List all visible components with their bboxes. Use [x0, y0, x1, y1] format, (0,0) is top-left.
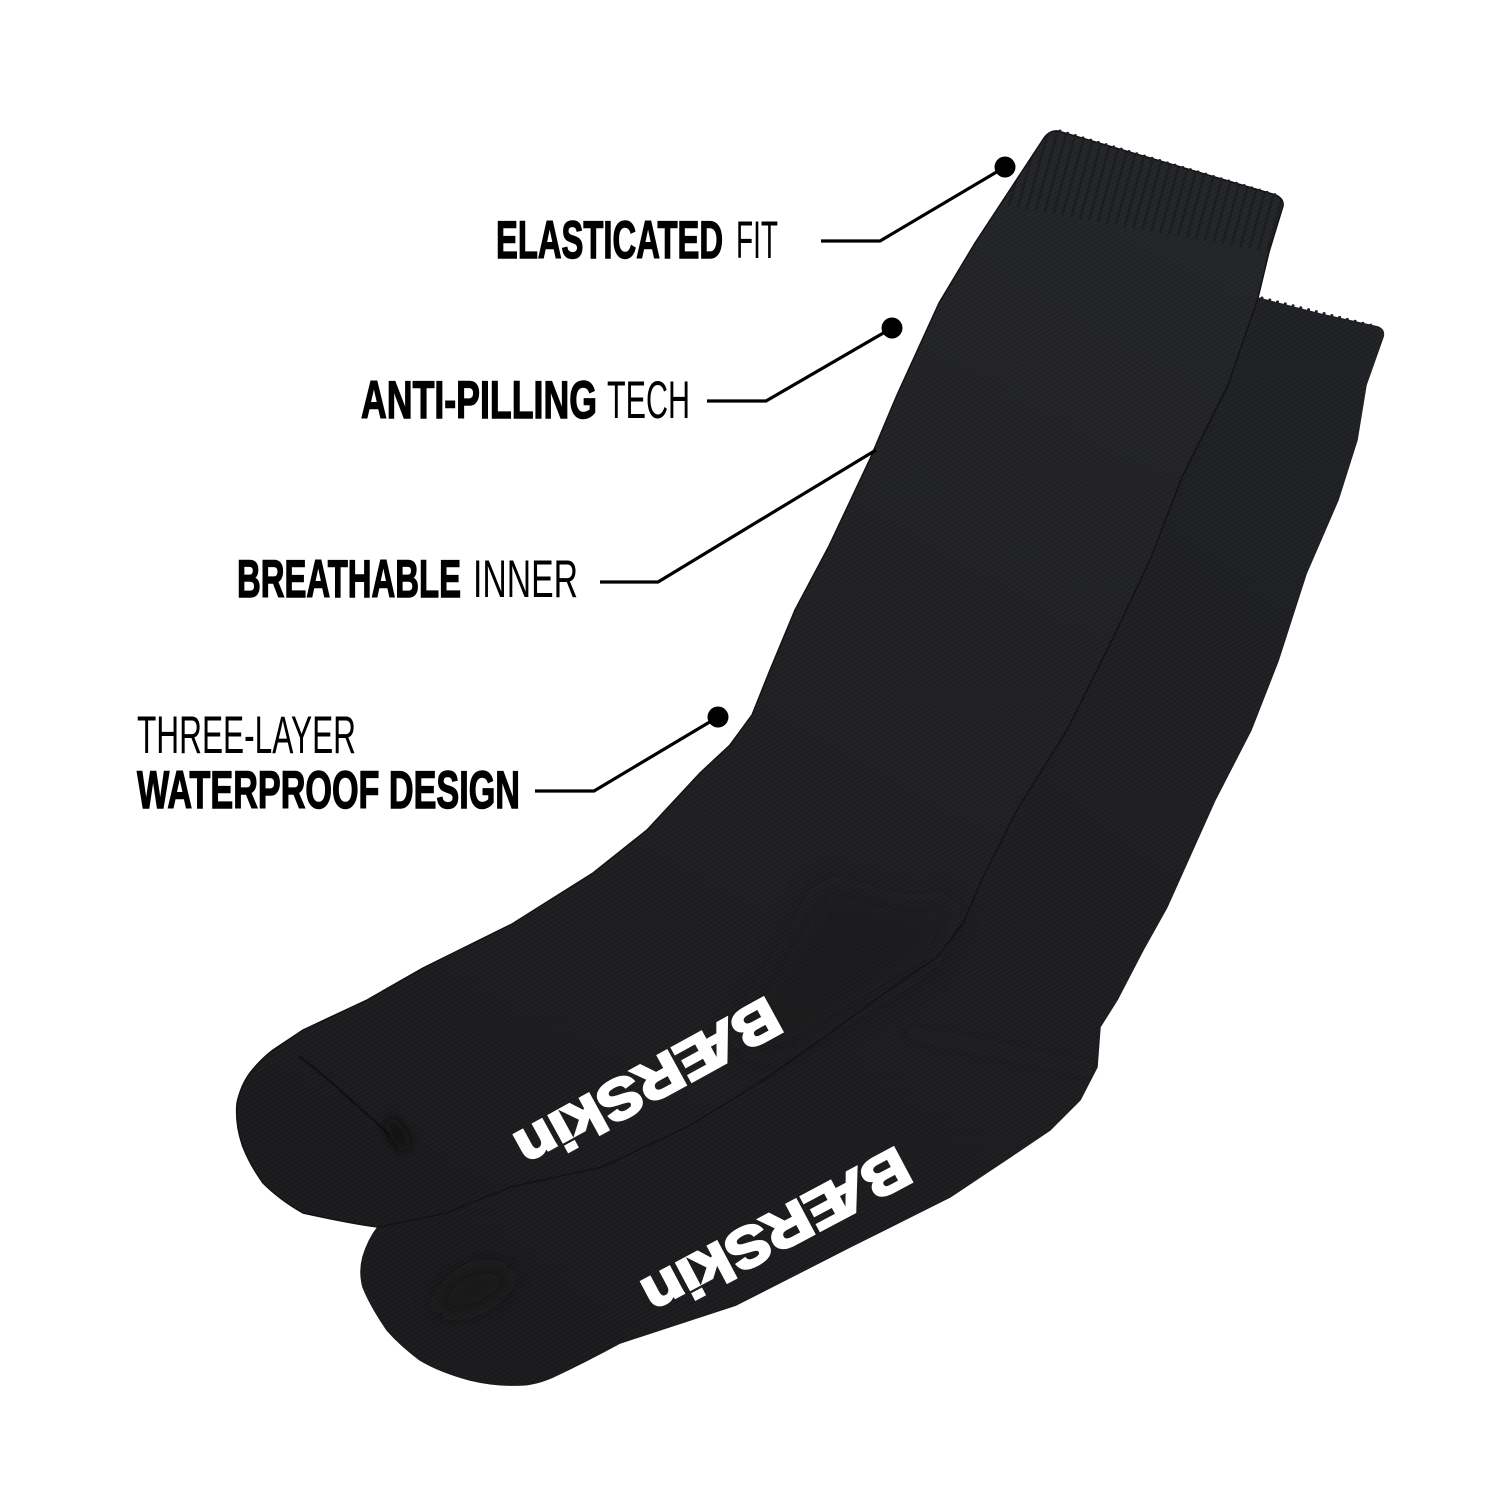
front sock cuff scalloped edge — [1060, 131, 1276, 195]
front sock — [237, 131, 1283, 1227]
front sock toe seam — [300, 1057, 397, 1147]
front sock heel shading — [730, 882, 960, 1060]
logo: front sock: BÆRSkin — [505, 985, 792, 1181]
leader line — [535, 717, 718, 791]
callout: anti-pilling tech — [361, 318, 902, 430]
socks photo — [237, 131, 1383, 1385]
label: TECH — [607, 371, 690, 430]
front sock toe shadow — [381, 1115, 415, 1155]
leader line — [707, 328, 892, 401]
leader line — [600, 450, 876, 582]
back sock heel crease — [910, 1033, 1090, 1070]
label: INNER — [473, 550, 578, 609]
back sock cuff scalloped edge — [1262, 298, 1378, 327]
callout: three-layer waterproof design — [137, 706, 728, 820]
label: THREE-LAYER — [137, 706, 356, 765]
dot — [882, 318, 902, 338]
label: ANTI-PILLING — [361, 371, 597, 430]
dot — [708, 706, 728, 728]
label: BREATHABLE — [237, 550, 461, 609]
back sock toe shading — [436, 1265, 513, 1313]
label: ELASTICATED — [496, 211, 723, 270]
callout: breathable inner — [237, 450, 876, 609]
logo: back sock: BÆRSkin — [633, 1135, 921, 1329]
label — [137, 706, 520, 820]
label: FIT — [736, 211, 778, 270]
dot — [994, 156, 1016, 178]
callout: elasticated fit — [496, 156, 1016, 270]
leader line — [821, 167, 1005, 241]
back sock — [361, 298, 1383, 1385]
front sock cuff ribbing — [1000, 131, 1283, 252]
label: WATERPROOF DESIGN — [137, 761, 520, 820]
